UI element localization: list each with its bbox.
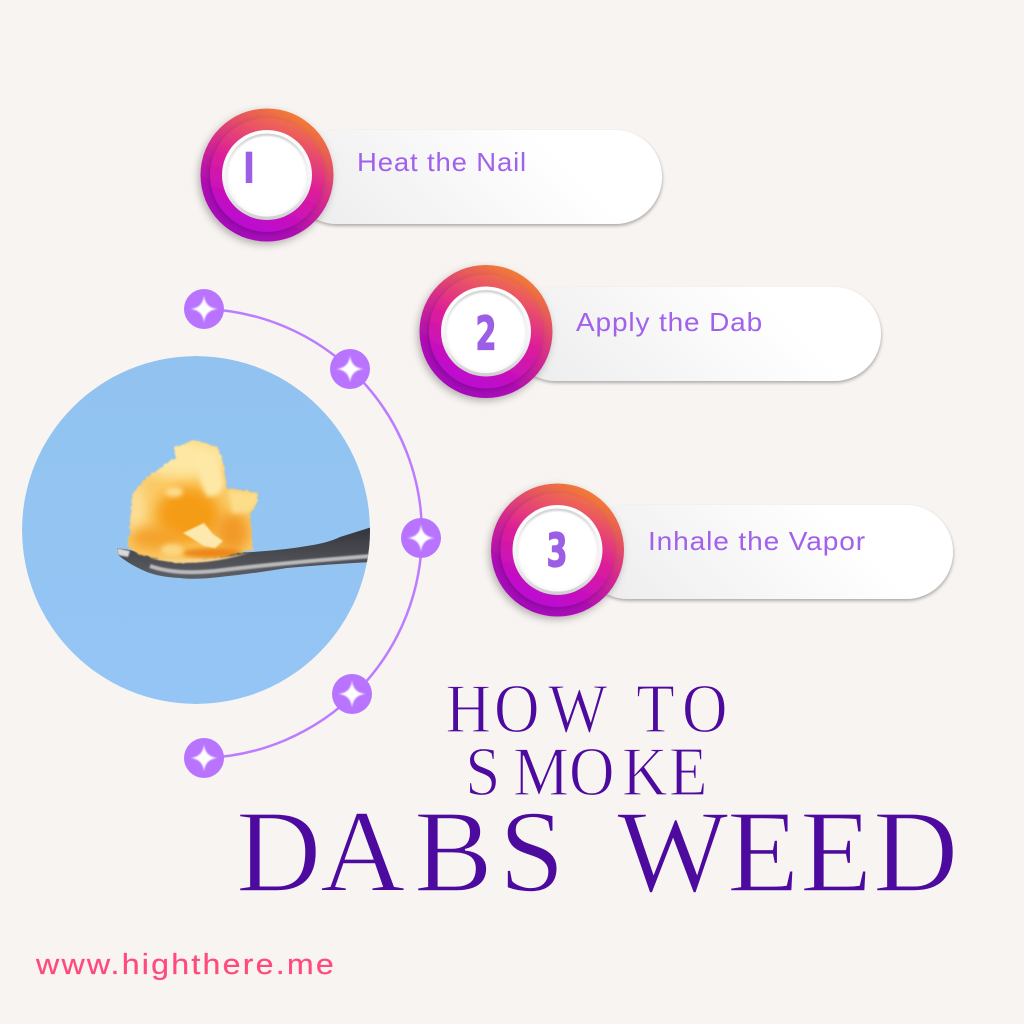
node 1 bbox=[184, 289, 224, 329]
step 3: Inhale the Vapor bbox=[491, 484, 953, 616]
pale upper area bbox=[136, 438, 228, 478]
badge 3 bbox=[491, 484, 624, 616]
title line: HOW TO: HOW TO bbox=[446, 671, 728, 748]
arc connector with star nodes bbox=[184, 289, 441, 778]
title line: SMOKE: SMOKE bbox=[465, 734, 707, 811]
tool tip glint bbox=[117, 548, 130, 557]
orange right bbox=[215, 512, 249, 552]
small chunk bbox=[165, 487, 183, 497]
step 2: Apply the Dab bbox=[420, 265, 881, 398]
blue photo background bbox=[22, 356, 370, 704]
label 1: Heat the Nail bbox=[357, 147, 527, 177]
title line: DABS WEED: DABS WEED bbox=[236, 786, 958, 917]
node 5 bbox=[184, 738, 224, 778]
node 2 bbox=[330, 349, 370, 389]
photo: dab of wax on a metal tool bbox=[22, 356, 372, 704]
metal dab tool bbox=[117, 527, 372, 579]
pill panel 3 bbox=[581, 505, 953, 599]
pale left edge bbox=[127, 482, 145, 542]
label 3: Inhale the Vapor bbox=[648, 526, 866, 556]
arc line bbox=[204, 309, 422, 758]
badge 1: I bbox=[243, 142, 255, 193]
orange core bbox=[156, 487, 220, 543]
wax glob bbox=[126, 439, 260, 564]
badge 1 bbox=[200, 108, 334, 242]
badge 2: 2 bbox=[476, 306, 496, 360]
orange lower left bbox=[129, 526, 181, 550]
tool body bbox=[117, 527, 372, 579]
node 3 bbox=[401, 518, 441, 558]
pill panel 2 bbox=[509, 287, 881, 381]
pale streak bbox=[198, 464, 226, 500]
wax cream bottom edge bbox=[150, 552, 252, 563]
website url: www.highthere.me bbox=[35, 949, 336, 981]
title bbox=[236, 671, 958, 917]
badge 2 bbox=[420, 265, 552, 398]
node 4 bbox=[332, 674, 372, 714]
tool highlight bbox=[150, 556, 372, 572]
step 1: Heat the Nail bbox=[200, 108, 662, 242]
label 2: Apply the Dab bbox=[576, 307, 763, 337]
badge 3: 3 bbox=[546, 524, 568, 578]
front chunk bbox=[183, 523, 223, 548]
lower chunk bbox=[161, 544, 183, 556]
right lobe bbox=[228, 490, 260, 513]
pill panel 1 bbox=[290, 130, 662, 224]
wax base tone bbox=[126, 440, 260, 564]
deep orange base bbox=[182, 548, 242, 558]
